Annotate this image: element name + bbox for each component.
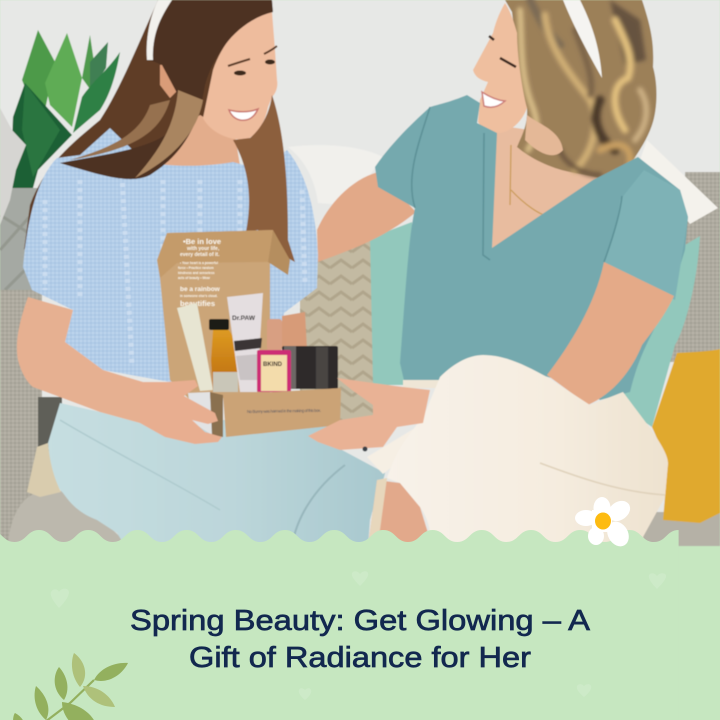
woman waist tie bbox=[403, 380, 440, 388]
ring bbox=[362, 446, 368, 452]
headband bbox=[147, 0, 172, 60]
sofa bbox=[0, 172, 720, 546]
woman hand on box bbox=[308, 378, 430, 452]
woman chest and neck bbox=[492, 125, 605, 250]
teal pillow bbox=[370, 222, 700, 427]
lid printed message: kindness and senseless bbox=[178, 271, 215, 275]
lid printed message: • Your heart is a powerful bbox=[180, 261, 218, 265]
woman right arm bbox=[547, 262, 674, 405]
sweater bbox=[23, 128, 318, 382]
icon: white daisy bbox=[575, 497, 634, 550]
girl right upper arm bbox=[282, 312, 307, 350]
woman legs bbox=[368, 480, 432, 546]
jeans bbox=[48, 403, 385, 546]
woman eyes and smile bbox=[489, 36, 516, 67]
title: Spring Beauty: Get Glowing – A bbox=[130, 605, 590, 637]
photo: mother and daughter on sofa bbox=[0, 0, 720, 546]
box side panel bbox=[188, 392, 212, 435]
necklace bbox=[510, 145, 575, 216]
Dr PawPaw tube bbox=[227, 293, 263, 392]
title bbox=[130, 605, 590, 674]
BKIND nail polish bbox=[257, 319, 291, 392]
lid printed message: acts of beauty • Wear bbox=[178, 276, 211, 280]
icon: white feather plume bbox=[0, 108, 26, 225]
girl left arm bbox=[17, 297, 167, 423]
amber bottle bbox=[209, 319, 238, 392]
woman hair bbox=[505, 0, 656, 178]
girl hair back bbox=[24, 0, 250, 250]
woman face bbox=[473, 3, 527, 133]
box lid interior bbox=[160, 230, 273, 400]
box right flap bbox=[268, 230, 290, 275]
tube product bbox=[177, 303, 213, 391]
lid printed message: force • Practice random bbox=[178, 266, 214, 270]
lid printed message: with your life, bbox=[186, 246, 220, 252]
white pillows bbox=[288, 140, 718, 224]
wall background bbox=[0, 0, 720, 546]
teal t-shirt bbox=[375, 95, 688, 400]
woman bbox=[367, 0, 688, 546]
cream skirt bbox=[367, 422, 425, 474]
girl face bbox=[203, 12, 277, 140]
fringe bbox=[27, 443, 61, 497]
dark jar bbox=[282, 346, 338, 389]
faint hearts bbox=[51, 571, 666, 700]
girl eyes and smile bbox=[228, 46, 277, 66]
lid printed message: every detail of it. bbox=[180, 252, 220, 258]
BKIND nail polish: BKIND bbox=[263, 362, 283, 368]
lid printed message: •Be in love bbox=[183, 237, 221, 246]
girl bbox=[17, 0, 385, 546]
lid printed message: be a rainbow bbox=[180, 286, 221, 293]
yellow cushion bbox=[652, 349, 720, 523]
lid printed message: beautifies bbox=[180, 299, 215, 308]
Dr PawPaw tube: Dr.PAW bbox=[232, 315, 256, 322]
green wavy footer panel bbox=[0, 530, 679, 720]
headband bbox=[563, 0, 602, 78]
open cardboard beauty box bbox=[140, 230, 430, 452]
girl neck bbox=[150, 115, 242, 178]
beige throw pillow bbox=[300, 238, 376, 430]
icon: potted agave plant bbox=[0, 30, 120, 292]
lid printed message bbox=[178, 237, 221, 308]
woman arm behind shoulder bbox=[317, 172, 416, 262]
box front caption: No Bunny was harmed in the making of this box. bbox=[247, 408, 321, 414]
box front panel bbox=[223, 388, 341, 437]
lid printed message: in someone else's cloud. bbox=[180, 294, 218, 298]
icon: leafy sprig bbox=[13, 653, 128, 720]
girl hand holding box bbox=[140, 380, 222, 444]
girl hair front bbox=[60, 0, 273, 179]
title: Gift of Radiance for Her bbox=[189, 642, 532, 674]
